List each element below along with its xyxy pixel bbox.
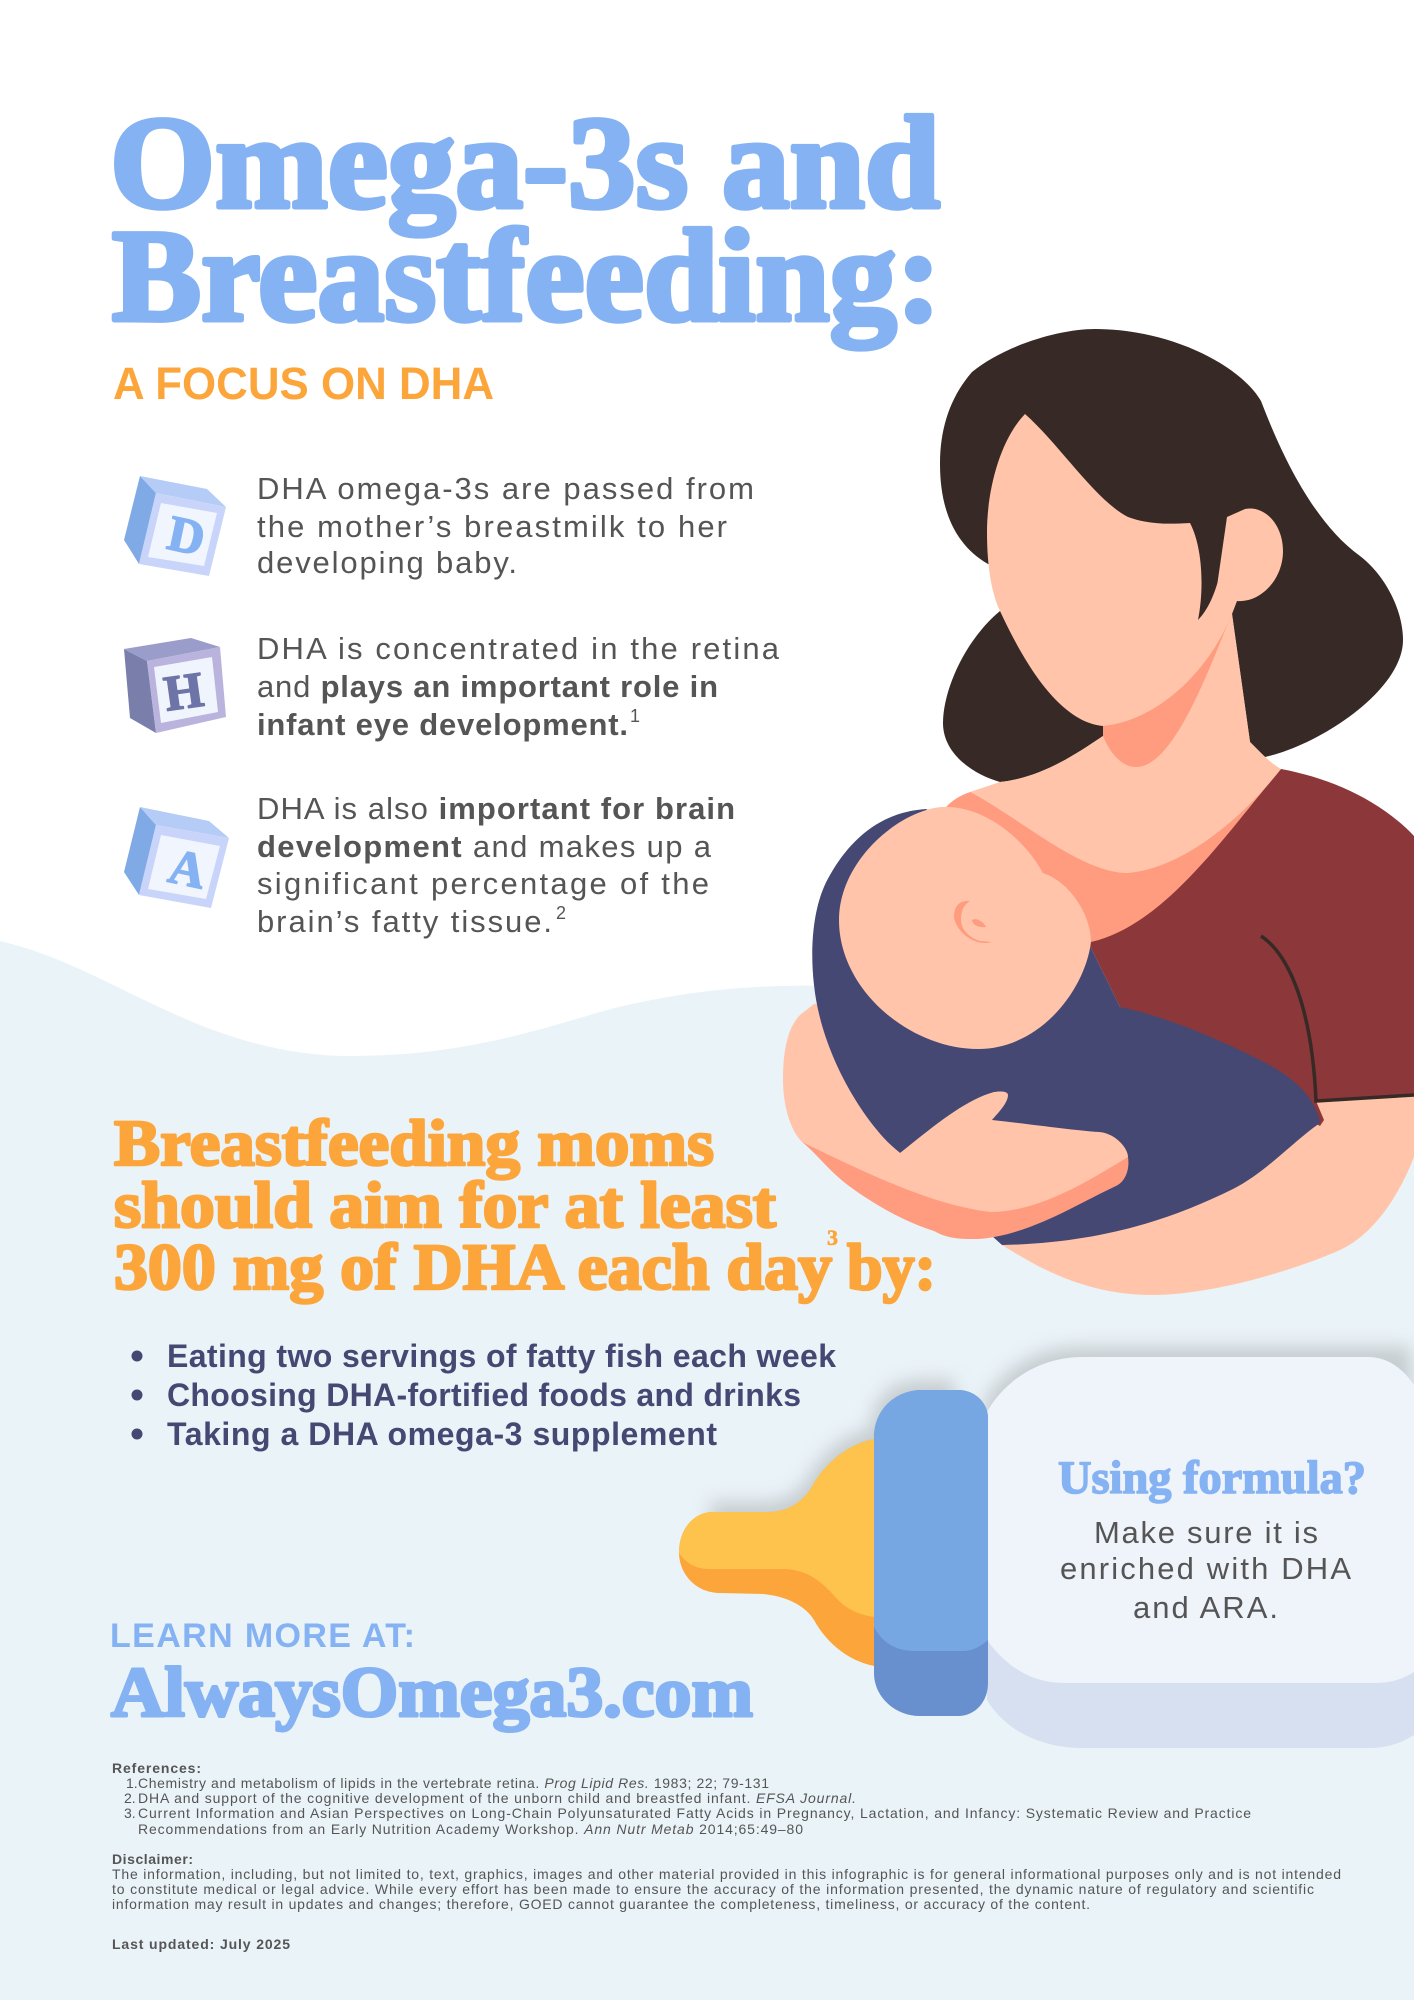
references: DHA and support of the cognitive development of the unborn child and breastfed infant. EFSA Journal. xyxy=(138,1790,856,1806)
call to action: LEARN MORE AT: xyxy=(110,1617,415,1655)
references: 1. xyxy=(126,1775,138,1791)
disclaimer xyxy=(112,1851,1341,1912)
heading: DHA goal: 300 mg of DHA each day xyxy=(114,1231,832,1304)
text: point two xyxy=(257,631,780,742)
blanket xyxy=(812,809,1320,1245)
ear xyxy=(1215,508,1283,614)
lower body xyxy=(1002,1095,1414,1295)
text: point three xyxy=(257,791,735,939)
callout: using formula xyxy=(1058,1452,1366,1625)
text: point three: brain’s fatty tissue. xyxy=(257,904,552,939)
subtitle: A FOCUS ON DHA xyxy=(113,358,494,409)
hair xyxy=(940,329,1403,782)
heading: DHA goal: by: xyxy=(847,1231,936,1304)
references: Recommendations from an Early Nutrition Academy Workshop. Ann Nutr Metab 2014;65:49–80 xyxy=(138,1821,803,1837)
illustration: mother and baby xyxy=(783,329,1414,1295)
icon: block A: A xyxy=(164,837,211,900)
callout: using formula: enriched with DHA xyxy=(1060,1551,1351,1586)
neck and chest xyxy=(970,614,1281,873)
bottle front xyxy=(987,1357,1414,1683)
icon: block H xyxy=(124,638,226,733)
icon: block A xyxy=(124,807,229,908)
baby ear xyxy=(954,901,992,943)
disclaimer: to constitute medical or legal advice. While every effort has been made to ensure the accuracy of the information presented, the dynamic nature of regulatory and scientific xyxy=(112,1881,1314,1897)
teat xyxy=(679,1439,874,1666)
title xyxy=(110,89,941,349)
illustration: baby bottle xyxy=(679,1347,1414,1748)
references: Chemistry and metabolism of lipids in the vertebrate retina. Prog Lipid Res. 1983; 22; 79-131 xyxy=(138,1775,769,1791)
arm behind blanket xyxy=(783,1000,900,1160)
text: point three: development and makes up a xyxy=(257,829,712,864)
references: References: xyxy=(112,1760,201,1776)
references: 3. xyxy=(124,1805,136,1821)
baby head xyxy=(839,807,1091,1049)
text: point two: DHA is concentrated in the retina xyxy=(257,631,780,666)
text: point one: developing baby. xyxy=(257,545,517,580)
text: point three: DHA is also important for brain xyxy=(257,791,735,826)
callout: using formula: Make sure it is xyxy=(1094,1515,1318,1550)
text: point two: infant eye development. xyxy=(257,707,628,742)
collar xyxy=(874,1390,988,1716)
text: point two: and plays an important role in xyxy=(257,669,718,704)
heading: DHA goal xyxy=(114,1107,936,1304)
text: point three: significant percentage of the xyxy=(257,866,709,901)
bullet list: Eating two servings of fatty fish each week xyxy=(167,1338,836,1374)
shadow xyxy=(710,1347,1411,1530)
shirt xyxy=(1060,769,1414,1126)
callout: using formula: and ARA. xyxy=(1133,1590,1278,1625)
heading: DHA goal: should aim for at least xyxy=(114,1169,776,1242)
text: point one: the mother’s breastmilk to her xyxy=(257,509,727,544)
neckline shadow xyxy=(946,769,1281,942)
call to action xyxy=(110,1617,753,1732)
disclaimer: Disclaimer: xyxy=(112,1851,193,1867)
references: 2. xyxy=(124,1790,136,1806)
call to action: AlwaysOmega3.com xyxy=(111,1654,753,1732)
arm shadow xyxy=(802,1142,1128,1239)
heading: DHA goal: Breastfeeding moms xyxy=(114,1107,714,1180)
callout: using formula: Using formula? xyxy=(1058,1452,1366,1504)
title: Omega-3s and xyxy=(110,89,940,236)
disclaimer: The information, including, but not limited to, text, graphics, images and other material provided in this infographic is for general informational purposes only and is not intended xyxy=(112,1866,1341,1882)
text: point one xyxy=(257,471,754,580)
face xyxy=(987,414,1232,726)
icon: block H: H xyxy=(160,661,207,722)
references xyxy=(112,1760,1251,1837)
bullet list: Taking a DHA omega-3 supplement xyxy=(167,1416,717,1452)
references: Current Information and Asian Perspectives on Long-Chain Polyunsaturated Fatty Acids in Pregnancy, Lactation, and Infancy: Systematic Review and Practice xyxy=(138,1805,1251,1821)
title: Breastfeeding: xyxy=(112,202,941,349)
bottle base shade xyxy=(987,1357,1414,1748)
last updated: Last updated: July 2025 xyxy=(112,1936,290,1952)
sleeve line xyxy=(1261,936,1414,1101)
bullet list: Choosing DHA-fortified foods and drinks xyxy=(167,1377,801,1413)
disclaimer: information may result in updates and changes; therefore, GOED cannot guarantee the completeness, timeliness, or accuracy of the content. xyxy=(112,1896,1090,1912)
icon: block D: D xyxy=(163,504,210,567)
text: point two: 1 xyxy=(630,706,640,726)
text: point one: DHA omega-3s are passed from xyxy=(257,471,754,506)
arm xyxy=(802,1091,1128,1212)
icon: block D xyxy=(124,476,226,576)
heading: DHA goal: 3 xyxy=(827,1225,838,1250)
bullet list xyxy=(132,1338,836,1452)
text: point three: 2 xyxy=(556,903,566,923)
neck shadow xyxy=(1103,614,1232,767)
